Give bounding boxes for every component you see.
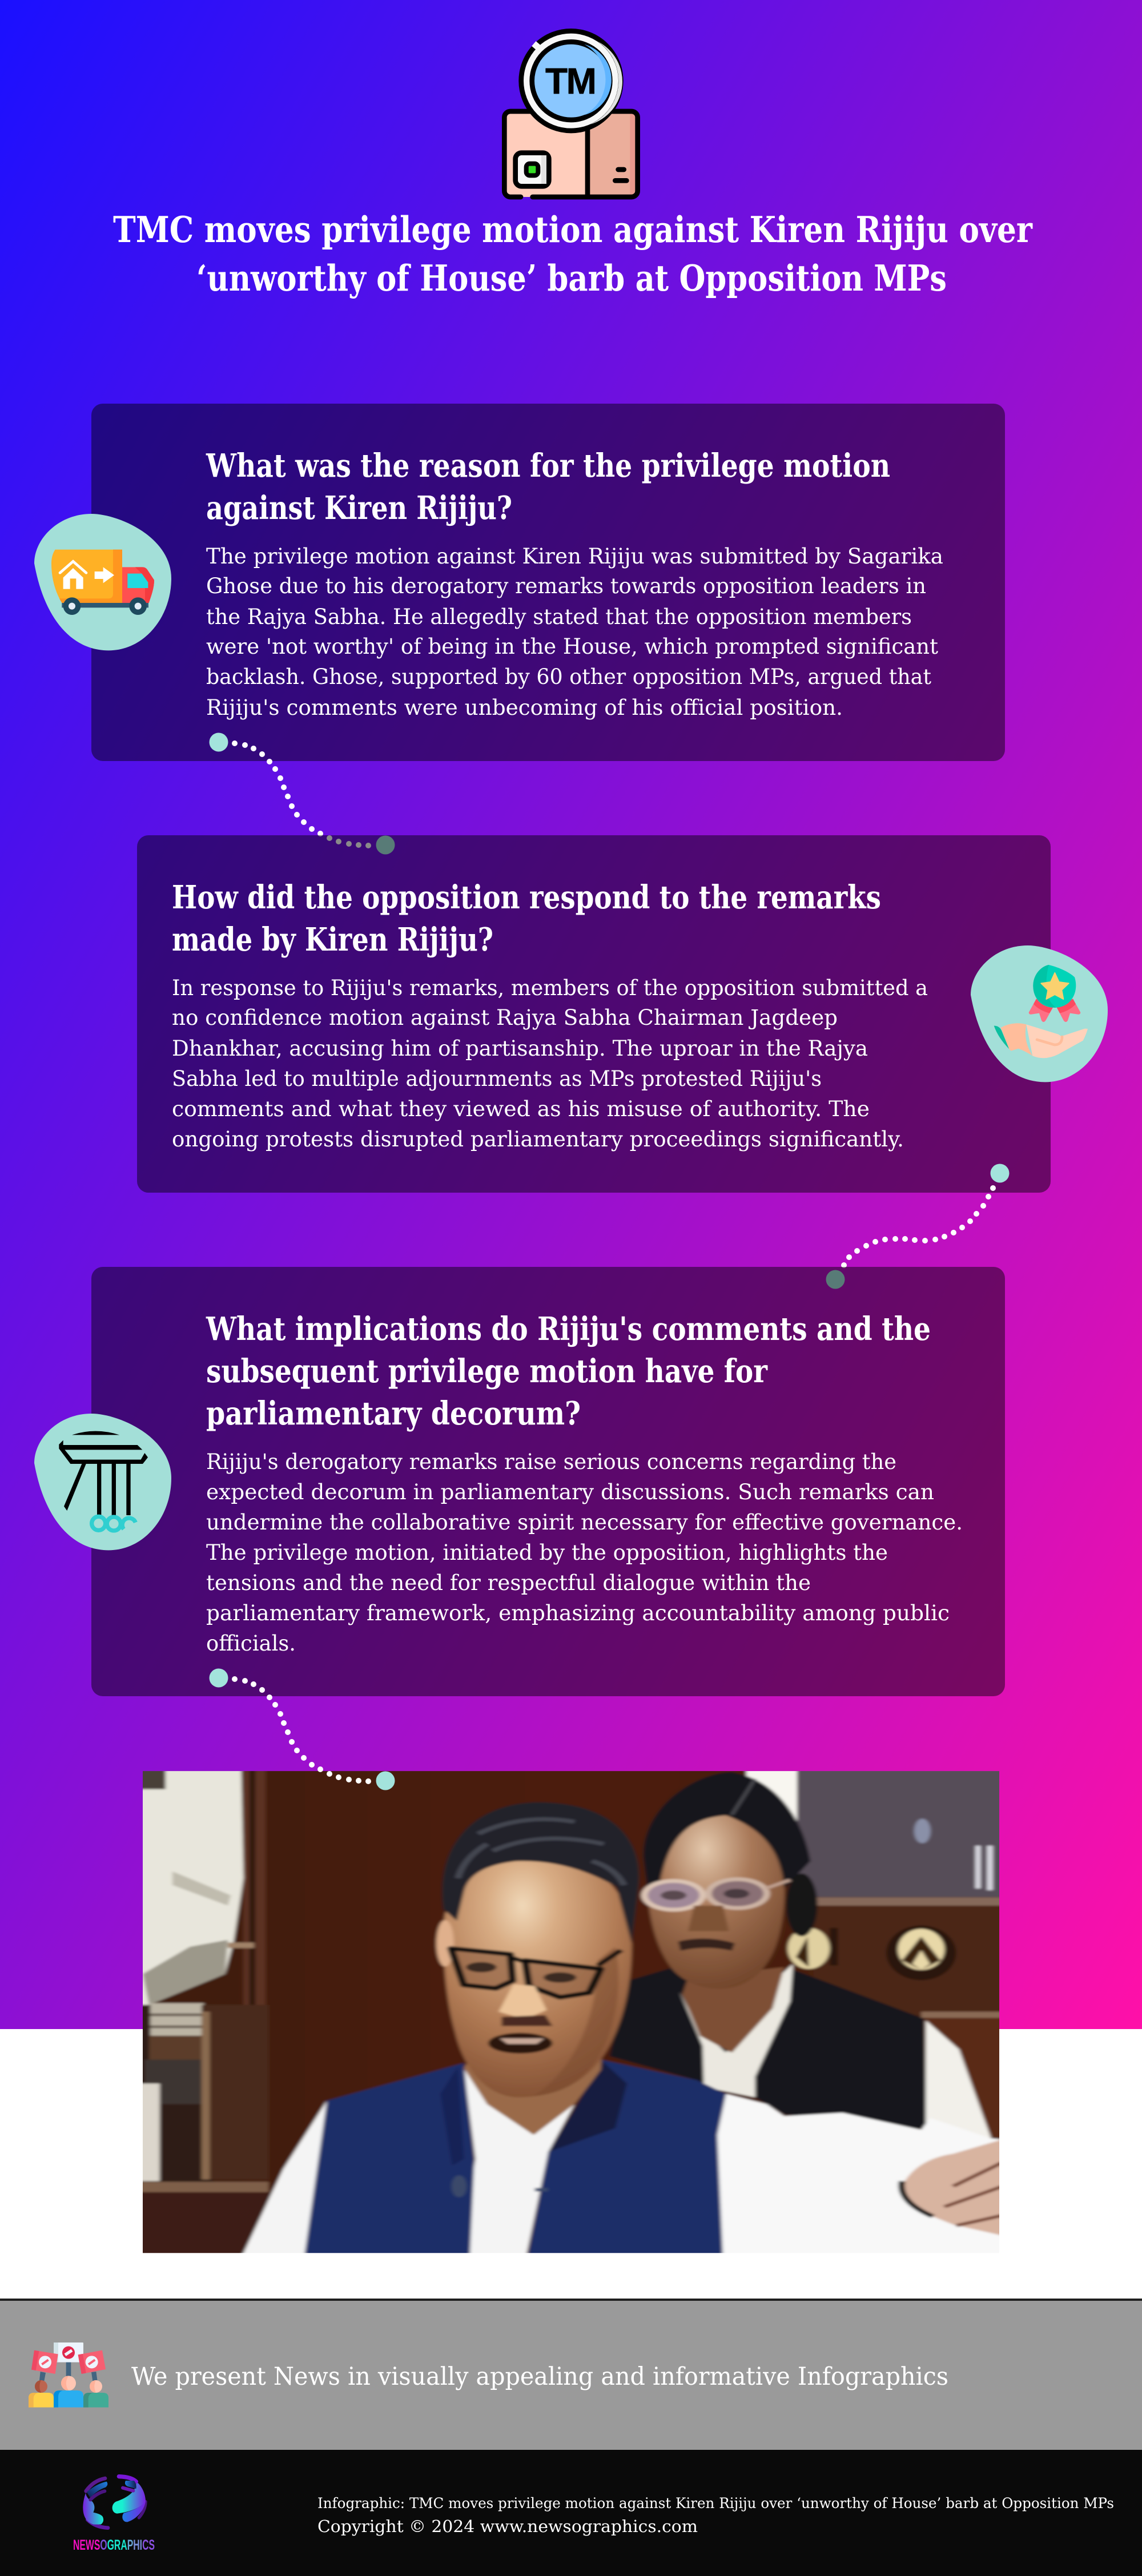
text block: panel 1: Ghose due to his derogatory remarks towards opposition leaders in <box>206 574 926 598</box>
heading: panel 2: How did the opposition respond to the remarks <box>172 879 881 916</box>
main figure: neck and face <box>464 2050 602 2135</box>
text block: panel 1: The privilege motion against Kiren Rijiju was submitted by Sagarika <box>206 544 943 569</box>
heading: panel 2 <box>172 879 881 959</box>
heading: panel 1: What was the reason for the privilege motion <box>206 447 890 485</box>
icon: parliament pillar <box>34 1414 171 1550</box>
main figure: hair <box>442 1802 639 1943</box>
footer source line: Infographic: TMC moves privilege motion against Kiren Rijiju over ‘unworthy of House’ barb at Opposition MPs <box>317 2495 1114 2511</box>
text block: panel 2: no confidence motion against Rajya Sabha Chairman Jagdeep <box>172 1005 838 1030</box>
main figure: nose and mouth <box>498 1985 546 2019</box>
heading: panel 1: against Kiren Rijiju? <box>206 489 512 527</box>
text block: panel 1: backlash. Ghose, supported by 60 other opposition MPs, argued that <box>206 665 931 689</box>
main figure: glasses <box>451 1949 513 1989</box>
text block: panel 1 <box>206 544 943 720</box>
text block: panel 2: Dhankhar, accusing him of partisanship. The uproar in the Rajya <box>172 1036 868 1061</box>
heading: panel 1 <box>206 447 890 527</box>
logo wordmark: NEWSOGRAPHICS <box>73 2537 155 2553</box>
title <box>113 208 1033 299</box>
right background <box>742 1771 801 1822</box>
text block: panel 3: tensions and the need for respectful dialogue within the <box>206 1571 811 1595</box>
main figure: hand <box>901 2139 999 2236</box>
navy vest <box>304 2063 475 2261</box>
background man <box>609 1966 927 2130</box>
connector: panel 2 to panel 3 <box>826 1164 1010 1289</box>
heading: panel 3: parliamentary decorum? <box>206 1395 581 1432</box>
footer band <box>0 2450 1142 2576</box>
panel: implications for decorum <box>91 1267 1005 1696</box>
left background figure and furniture <box>143 1771 247 2007</box>
logo: Newsographics globe <box>83 2477 146 2528</box>
text block: panel 3: Rijiju's derogatory remarks raise serious concerns regarding the <box>206 1450 896 1474</box>
photo: Kiren Rijiju speaking in the Rajya Sabha <box>132 1765 1011 2261</box>
main figure: white sleeves and shirt <box>239 2100 327 2261</box>
text block: panel 1: Rijiju's comments were unbecoming of his official position. <box>206 695 843 720</box>
text block: panel 2: Sabha led to multiple adjournments as MPs protested Rijiju's <box>172 1066 822 1091</box>
text block: panel 3: parliamentary framework, emphasizing accountability among public <box>206 1601 950 1625</box>
connector: panel 3 to photo <box>209 1668 395 1790</box>
footer copyright line: Copyright © 2024 www.newsographics.com <box>317 2517 698 2536</box>
heading: panel 2: made by Kiren Rijiju? <box>172 921 493 959</box>
panel: opposition response <box>137 835 1051 1193</box>
text block: panel 3: expected decorum in parliamentary discussions. Such remarks can <box>206 1480 934 1504</box>
text block: panel 3 <box>206 1450 963 1656</box>
gradient background <box>0 0 1142 2029</box>
panel: reason for the privilege motion <box>91 404 1005 761</box>
text block: panel 3: officials. <box>206 1631 296 1656</box>
tagline band <box>0 2299 1142 2450</box>
icon: protesters with signs <box>29 2342 108 2408</box>
text block: panel 2: In response to Rijiju's remarks, members of the opposition submitted a <box>172 976 928 1000</box>
text block: panel 2: comments and what they viewed as his misuse of authority. The <box>172 1097 870 1121</box>
text block: panel 2: ongoing protests disrupted parliamentary proceedings significantly. <box>172 1127 904 1152</box>
text block: panel 3: undermine the collaborative spirit necessary for effective governance. <box>206 1510 963 1535</box>
text block: panel 3: The privilege motion, initiated by the opposition, highlights the <box>206 1540 888 1565</box>
heading: panel 3: What implications do Rijiju's comments and the <box>206 1310 931 1348</box>
title: ‘unworthy of House’ barb at Opposition MPs <box>196 257 947 299</box>
tagline text: We present News in visually appealing and informative Infographics <box>131 2362 948 2391</box>
connector: panel 1 to panel 2 <box>209 733 395 854</box>
icon: trademark box <box>504 31 638 197</box>
icon: award medal in hand <box>971 945 1108 1082</box>
text block: panel 1: were 'not worthy' of being in the House, which prompted significant <box>206 634 938 659</box>
text block: panel 2 <box>172 976 928 1152</box>
icon: delivery truck <box>34 514 171 650</box>
heading: panel 3 <box>206 1310 931 1432</box>
icon label: TM: TM <box>545 61 597 102</box>
heading: panel 3: subsequent privilege motion have for <box>206 1353 768 1390</box>
text block: panel 1: the Rajya Sabha. He allegedly stated that the opposition members <box>206 605 912 629</box>
